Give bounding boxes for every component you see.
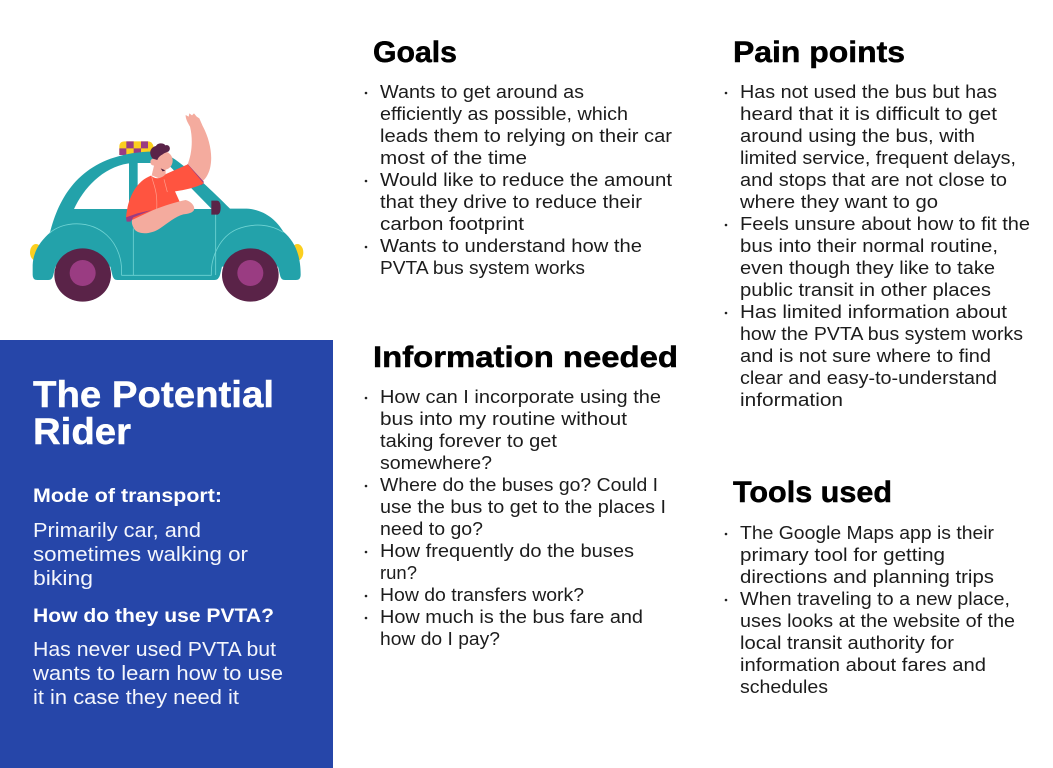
list: pain points: and is not sure where to find xyxy=(740,345,991,366)
car door and fender lines xyxy=(49,213,283,275)
text block: mode of transport: Primarily car, and xyxy=(33,520,201,542)
list: tools used: local transit authority for xyxy=(740,632,954,653)
list: tools used: primary tool for getting xyxy=(740,544,945,565)
text block: PVTA use: wants to learn how to use xyxy=(32,663,283,685)
heading: Pain points: Pain points xyxy=(733,36,905,69)
list: information needed xyxy=(365,386,666,649)
list: goals: efficiently as possible, which xyxy=(380,103,628,124)
list: information needed: How frequently do the buses xyxy=(380,540,634,561)
list: information needed: How much is the bus fare and xyxy=(380,606,643,627)
heading: Information needed: Information needed xyxy=(373,341,678,374)
hair xyxy=(150,143,170,160)
list: pain points: bus into their normal routine, xyxy=(740,235,998,256)
red shirt xyxy=(126,164,204,221)
car windows xyxy=(74,163,212,209)
list: information needed: Where do the buses go? Could I xyxy=(380,474,658,495)
text block: PVTA use xyxy=(32,639,283,709)
wheels xyxy=(54,248,279,302)
heading: Tools used: Tools used xyxy=(733,476,892,509)
icon: headlights xyxy=(30,244,303,261)
list: tools used xyxy=(725,522,1015,697)
list: pain points xyxy=(725,81,1030,410)
text block: mode of transport: sometimes walking or xyxy=(33,544,248,566)
list: information needed: somewhere? xyxy=(380,452,492,473)
list: information needed: taking forever to get xyxy=(380,430,557,451)
icon: taxi roof sign xyxy=(119,141,155,155)
list: pain points: clear and easy-to-understand xyxy=(740,367,997,388)
subheading: mode of transport: Mode of transport: xyxy=(33,485,222,507)
text block: mode of transport xyxy=(33,520,248,590)
driver xyxy=(126,113,211,233)
list: pain points: limited service, frequent delays, xyxy=(740,147,1016,168)
list: goals: that they drive to reduce their xyxy=(380,191,642,212)
list: tools used: The Google Maps app is their xyxy=(740,522,994,543)
list: information needed: How do transfers work? xyxy=(380,584,584,605)
text block: PVTA use: Has never used PVTA but xyxy=(33,639,276,661)
list: goals: carbon footprint xyxy=(380,213,524,234)
list: tools used: schedules xyxy=(740,676,828,697)
title: Rider xyxy=(33,411,131,452)
side mirror xyxy=(211,201,221,215)
list: goals: PVTA bus system works xyxy=(380,257,585,278)
list: pain points: heard that it is difficult to get xyxy=(740,103,997,124)
list: information needed: need to go? xyxy=(380,518,483,539)
text block: mode of transport: biking xyxy=(33,568,93,590)
list: goals: Would like to reduce the amount xyxy=(380,169,672,190)
list: tools used: information about fares and xyxy=(740,654,986,675)
list: pain points: even though they like to take xyxy=(740,257,995,278)
list: goals: most of the time xyxy=(380,147,527,168)
resting arm xyxy=(132,200,194,233)
list: pain points: how the PVTA bus system works xyxy=(740,323,1023,344)
list: goals xyxy=(365,81,672,278)
list: information needed: run? xyxy=(380,562,417,583)
title xyxy=(33,374,274,452)
list: tools used: uses looks at the website of the xyxy=(740,610,1015,631)
list: pain points: public transit in other places xyxy=(740,279,991,300)
neck and head xyxy=(152,162,166,181)
list: goals: Wants to understand how the xyxy=(380,235,642,256)
list: information needed: How can I incorporate using the xyxy=(380,386,661,407)
list: tools used: directions and planning trips xyxy=(740,566,994,587)
list: pain points: information xyxy=(740,389,843,410)
list: pain points: and stops that are not close to xyxy=(740,169,1007,190)
list: pain points: where they want to go xyxy=(739,191,938,212)
list: pain points: around using the bus, with xyxy=(740,125,975,146)
text block: PVTA use: it in case they need it xyxy=(33,687,239,709)
title: The Potential xyxy=(33,374,274,415)
list: pain points: Has not used the bus but has xyxy=(740,81,997,102)
icon: teal taxi car with waving driver xyxy=(30,113,303,302)
list: information needed: bus into my routine without xyxy=(380,408,627,429)
list: information needed: how do I pay? xyxy=(380,628,500,649)
panel: The Potential Rider xyxy=(0,340,333,768)
list: information needed: use the bus to get to the places I xyxy=(380,496,666,517)
list: pain points: Has limited information about xyxy=(740,301,1007,322)
list: pain points: Feels unsure about how to fit the xyxy=(740,213,1030,234)
waving arm xyxy=(186,113,211,183)
list: tools used: When traveling to a new place, xyxy=(740,588,1010,609)
heading: Goals: Goals xyxy=(373,36,457,69)
list: goals: leads them to relying on their car xyxy=(380,125,672,146)
list: goals: Wants to get around as xyxy=(380,81,584,102)
subheading: how do they use PVTA: How do they use PVTA? xyxy=(33,605,274,627)
car body xyxy=(33,152,301,280)
